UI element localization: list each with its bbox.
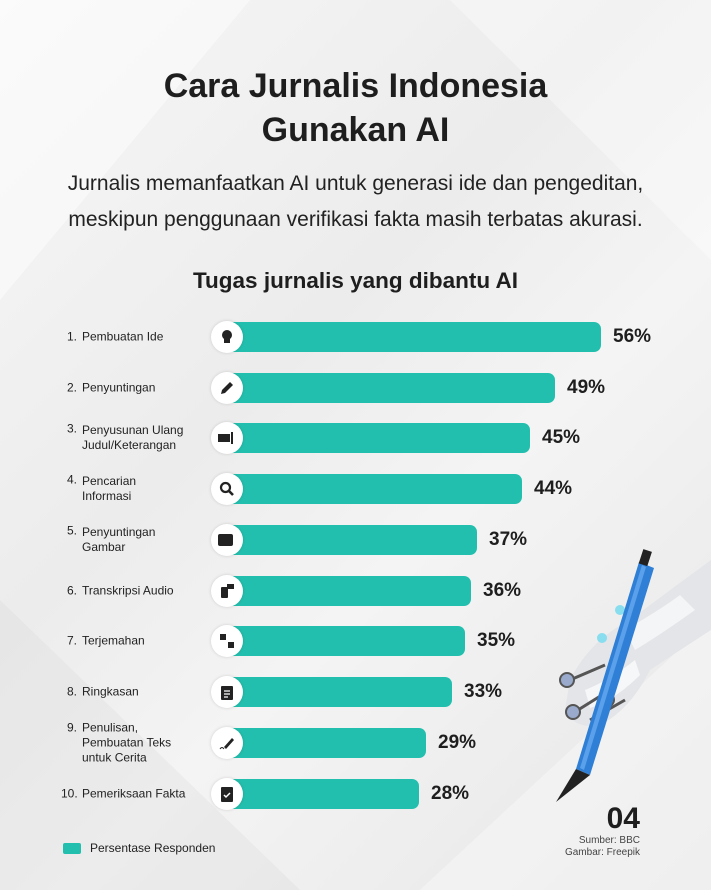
page number: 04 [607, 802, 640, 835]
row 5 [67, 523, 527, 557]
bar chart: Penyusunan Ulang [82, 423, 183, 437]
bar chart: Penyuntingan [82, 525, 155, 539]
bar chart: 28% [431, 783, 469, 804]
title: Cara Jurnalis Indonesia [164, 67, 547, 105]
row 8 [67, 675, 502, 709]
bar chart: 9. [67, 720, 77, 734]
bar chart: Pencarian [82, 474, 136, 488]
source credits [565, 835, 640, 858]
subtitle [68, 172, 643, 231]
bar chart: Informasi [82, 489, 131, 503]
bar chart: untuk Cerita [82, 750, 147, 764]
bar chart: 4. [67, 472, 77, 486]
bar chart: 37% [489, 529, 527, 550]
row 6 [67, 574, 521, 608]
title: Gunakan AI [262, 111, 449, 149]
bar chart: 7. [67, 634, 77, 648]
bar chart: 44% [534, 478, 572, 499]
row 10 [61, 777, 469, 811]
bar chart: Transkripsi Audio [82, 584, 174, 598]
bar chart: Gambar [82, 540, 125, 554]
chart heading: Tugas jurnalis yang dibantu AI [193, 268, 518, 293]
bar chart: 29% [438, 732, 476, 753]
bar chart: 49% [567, 377, 605, 398]
bar chart: Pembuatan Teks [82, 736, 171, 750]
bar chart: Pembuatan Ide [82, 330, 163, 344]
bar chart: Pemeriksaan Fakta [82, 786, 185, 800]
row 1 [67, 320, 651, 354]
row 7 [67, 624, 515, 658]
bar chart: Ringkasan [82, 684, 139, 698]
bar chart: Terjemahan [82, 634, 145, 648]
bar chart: 35% [477, 630, 515, 651]
row 3 [67, 421, 580, 455]
bar chart: Penulisan, [82, 720, 138, 734]
bar chart: 6. [67, 584, 77, 598]
bar chart: 10. [61, 786, 78, 800]
source credits: Sumber: BBC [579, 835, 640, 846]
bar chart: Judul/Keterangan [82, 438, 176, 452]
bar chart: 8. [67, 684, 77, 698]
source credits: Gambar: Freepik [565, 847, 640, 858]
bar chart: 1. [67, 330, 77, 344]
row 9 [67, 720, 476, 764]
bar chart: Penyuntingan [82, 380, 155, 394]
subtitle: meskipun penggunaan verifikasi fakta masih terbatas akurasi. [68, 208, 643, 231]
bar chart: 5. [67, 523, 77, 537]
bar chart: 45% [542, 427, 580, 448]
title [164, 67, 548, 149]
row 4 [67, 472, 572, 506]
bar chart: 56% [613, 326, 651, 347]
illustration: robot hand with pen [556, 549, 711, 802]
subtitle: Jurnalis memanfaatkan AI untuk generasi ide dan pengeditan, [68, 172, 643, 195]
bar chart: 2. [67, 380, 77, 394]
bar chart: 36% [483, 580, 521, 601]
bar chart: 3. [67, 421, 77, 435]
bar chart: 33% [464, 681, 502, 702]
legend: Persentase Responden [90, 841, 215, 855]
row 2 [67, 371, 605, 405]
